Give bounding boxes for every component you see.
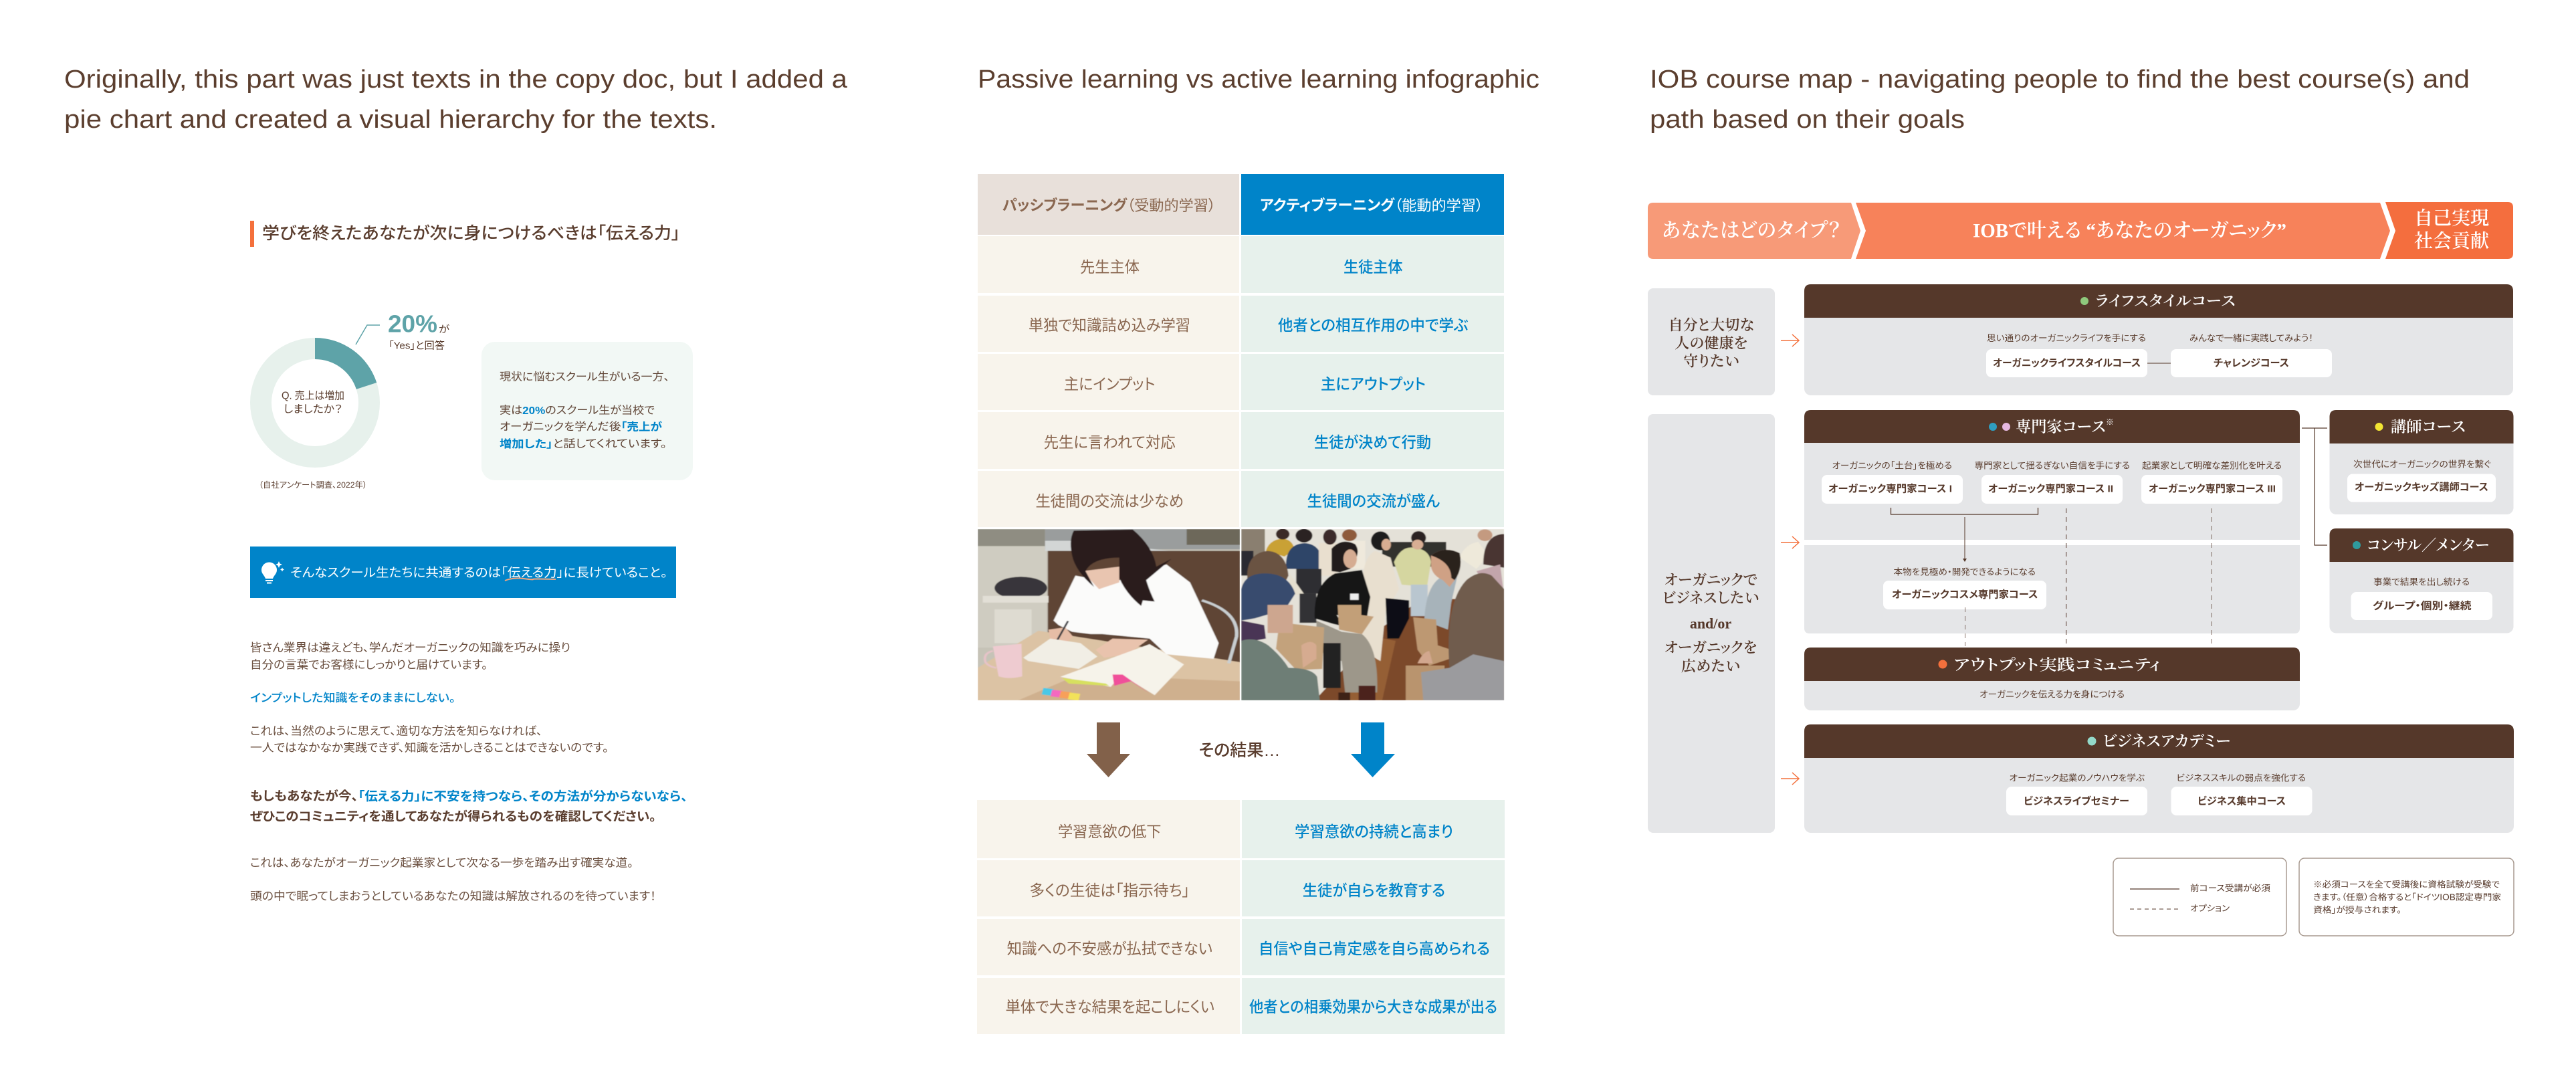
- text block: body copy: 自分の言葉でお客様にしっかりと届けています。: [250, 658, 488, 672]
- goal box: business: オーガニックで: [1664, 571, 1757, 589]
- panel: lifestyle course: [1804, 284, 2513, 395]
- panel: business academy: ビジネス集中コース: [2197, 795, 2286, 807]
- title: pie chart caption: Originally, this part was just texts in the copy doc, but I added a: [64, 66, 848, 94]
- panel: business academy: ビジネスアカデミー: [2103, 733, 2231, 749]
- text block: body copy: これは、当然のように思えて、適切な方法を知らなければ、: [250, 725, 542, 737]
- chevron banner: あなたはどのタイプ？: [1662, 219, 1841, 242]
- legend: qualification note: きます。（任意）合格すると「ドイツIOB認定専門家: [2313, 892, 2501, 902]
- passive column cells: 先生主体: [1080, 258, 1140, 276]
- panel: instructor course: オーガニックキッズ講師コース: [2355, 481, 2488, 493]
- panel: course map: [1648, 202, 2514, 936]
- panel: lifestyle course: 思い通りのオーガニックライフを手にする: [1987, 333, 2146, 343]
- panel: instructor course: 次世代にオーガニックの世界を繋ぐ: [2353, 459, 2490, 470]
- passive column cells: 生徒間の交流は少なめ: [1035, 492, 1184, 510]
- active results cells: 学習意欲の持続と高まり: [1295, 823, 1453, 840]
- panel: consultant and mentor: [2330, 528, 2513, 633]
- callout: 20 percent answered yes: 20%: [388, 310, 437, 337]
- legend: qualification note: ※必須コースを全て受講後に資格試験が受験で: [2313, 879, 2500, 890]
- goal box: business: [1648, 414, 1775, 833]
- banner: the power to communicate: [250, 547, 676, 598]
- active results cells: 生徒が自らを教育する: [1303, 882, 1445, 899]
- panel: expert course: ※: [2106, 417, 2114, 427]
- legend: qualification note: 資格」が授与されます。: [2313, 904, 2401, 915]
- table header: active: [1241, 174, 1504, 235]
- panel: survey summary: [481, 342, 693, 480]
- panel: consultant and mentor: 事業で結果を出し続ける: [2373, 577, 2470, 587]
- passive results cells: 知識への不安感が払拭できない: [1007, 940, 1212, 957]
- passive results cells: 学習意欲の低下: [1058, 823, 1161, 840]
- photo: students in active group discussion: [1241, 528, 1504, 700]
- donut chart: 20 percent yes: [261, 338, 377, 457]
- panel: survey summary: オーガニックを学んだ後 「売上が: [500, 420, 662, 433]
- chart source note: （自社アンケート調査、2022年）: [259, 480, 367, 490]
- legend: line types: オプション: [2190, 904, 2230, 913]
- goal box: business: ビジネスしたい: [1662, 590, 1759, 606]
- text block: body copy: 頭の中で眠ってしまおうとしているあなたの知識は解放されるのを待っています！: [250, 890, 656, 903]
- panel: expert course: 専門家として揺るぎない自信を手にする: [1974, 460, 2130, 471]
- panel: expert course: オーガニック専門家コース I: [1828, 483, 1952, 495]
- title: course map caption: [1650, 66, 2470, 134]
- panel: survey and communication copy: [250, 221, 693, 903]
- title: pie chart caption: [64, 66, 848, 134]
- title: course map caption: IOB course map - navigating people to find the best course(s) and: [1650, 66, 2470, 94]
- chevron banner: 社会貢献: [2414, 230, 2490, 252]
- panel: output community: [1804, 648, 2300, 710]
- panel: output community: アウトプット実践コミュニティ: [1953, 657, 2161, 673]
- table header: passive: パッシブラーニング（受動的学習）: [1002, 197, 1216, 214]
- panel: survey summary: 増加した」 と話してくれています。: [500, 437, 667, 450]
- panel: consultant and mentor: グループ・個別・継続: [2373, 599, 2472, 611]
- panel: instructor course: [2330, 410, 2513, 514]
- panel: expert course: オーガニックコスメ専門家コース: [1892, 589, 2038, 601]
- panel: business academy: ビジネスライブセミナー: [2024, 795, 2129, 807]
- table header: passive: [978, 174, 1239, 235]
- goal box: health: 自分と大切な: [1669, 317, 1754, 333]
- text block: body copy: これは、あなたがオーガニック起業家として次なる一歩を踏み出す確実な道。: [250, 856, 633, 870]
- passive column cells: 先生に言われて対応: [1044, 433, 1176, 451]
- chevron banner: IOBで叶える “あなたのオーガニック”: [1973, 219, 2286, 242]
- title: course map caption: path based on their goals: [1650, 106, 1965, 134]
- arrow: business to expert: [1781, 536, 1799, 549]
- label: as a result: その結果…: [1198, 741, 1280, 760]
- chevron banner: [1648, 202, 2513, 259]
- text block: body copy: 一人ではなかなか実践できず、知識を活かしきることはできないのです。: [250, 741, 609, 755]
- panel: expert course: 起業家として明確な差別化を叶える: [2142, 460, 2282, 471]
- dashed option lines: [1965, 508, 2212, 648]
- text block: body copy: もしもあなたが今、 「伝える力」に不安を持つなら、その方法が分からないなら、: [250, 789, 687, 803]
- goal box: health: 守りたい: [1683, 353, 1739, 369]
- text block: body copy: インプットした知識をそのままにしない。: [250, 692, 455, 704]
- panel: expert course: オーガニック専門家コース III: [2149, 483, 2276, 495]
- active column cells: 生徒間の交流が盛ん: [1307, 492, 1440, 510]
- arrow: passive results: [1087, 722, 1130, 777]
- callout: 20 percent answered yes: [356, 310, 449, 352]
- goal box: health: [1648, 288, 1775, 395]
- banner: the power to communicate: そんなスクール生たちに共通するのは「伝える力」に長けていること。: [290, 566, 667, 579]
- goal box: health: 人の健康を: [1675, 334, 1748, 352]
- legend: line types: [2113, 858, 2286, 936]
- donut chart: 20 percent yes: Q. 売上は増加: [282, 389, 344, 401]
- arrow: active results: [1351, 722, 1395, 777]
- panel: consultant and mentor: コンサル／メンター: [2367, 536, 2490, 554]
- active results cells: [1242, 800, 1505, 1034]
- photo: woman studying alone: [978, 529, 1240, 700]
- panel: business academy: [1804, 724, 2514, 833]
- panel: lifestyle course: チャレンジコース: [2214, 357, 2289, 369]
- legend: qualification note: [2299, 858, 2514, 936]
- passive column cells: [978, 236, 1239, 527]
- panel: expert course: オーガニックの「土台」を極める: [1832, 460, 1952, 471]
- icon: light bulb: [261, 561, 284, 583]
- passive column cells: 主にインプット: [1064, 375, 1156, 393]
- panel: business academy: ビジネススキルの弱点を強化する: [2176, 773, 2306, 783]
- legend: line types: 前コース受講が必須: [2190, 883, 2271, 893]
- active column cells: 他者との相互作用の中で学ぶ: [1278, 316, 1469, 334]
- panel: survey summary: 実は20%のスクール生が当校で: [500, 404, 655, 416]
- passive results cells: 単体で大きな結果を起こしにくい: [1006, 998, 1214, 1015]
- active column cells: 生徒が決めて行動: [1314, 433, 1431, 451]
- panel: instructor course: 講師コース: [2391, 419, 2466, 435]
- title: pie chart caption: pie chart and created a visual hierarchy for the texts.: [64, 106, 717, 134]
- passive results cells: 多くの生徒は「指示待ち」: [1030, 882, 1190, 899]
- panel: expert course: オーガニック専門家コース II: [1988, 483, 2113, 495]
- callout: 20 percent answered yes: 「Yes」と回答: [389, 340, 445, 352]
- goal box: business: and/or: [1690, 615, 1731, 631]
- panel: business academy: オーガニック起業のノウハウを学ぶ: [2009, 773, 2145, 783]
- panel: lifestyle course: ライフスタイルコース: [2095, 293, 2236, 309]
- active results cells: 他者との相乗効果から大きな成果が出る: [1249, 998, 1497, 1015]
- heading: what to learn next: 学びを終えたあなたが次に身につけるべきは「伝える力」: [262, 224, 680, 243]
- goal box: business: オーガニックを: [1664, 639, 1757, 656]
- passive results cells: [977, 800, 1240, 1034]
- text block: body copy: [250, 641, 687, 903]
- text block: body copy: 皆さん業界は違えども、学んだオーガニックの知識を巧みに操り: [250, 641, 570, 654]
- panel: expert course: 専門家コース: [2016, 419, 2105, 435]
- connector: expert to instructor and consultant: [2302, 428, 2327, 545]
- panel: expert course: [1804, 410, 2300, 633]
- panel: lifestyle course: オーガニックライフスタイルコース: [1993, 357, 2141, 369]
- donut chart: 20 percent yes: しましたか？: [284, 403, 342, 415]
- table header: active: アクティブラーニング（能動的学習）: [1260, 197, 1483, 214]
- arrow: health to lifestyle: [1781, 334, 1799, 346]
- active column cells: [1241, 236, 1504, 527]
- chevron banner: 自己実現: [2414, 207, 2489, 229]
- active column cells: 主にアウトプット: [1321, 375, 1426, 393]
- panel: output community: オーガニックを伝える力を身につける: [1979, 689, 2125, 700]
- goal box: business: 広めたい: [1681, 658, 1740, 674]
- callout: 20 percent answered yes: が: [439, 324, 449, 334]
- active column cells: 生徒主体: [1344, 258, 1403, 276]
- title: passive vs active caption: Passive learning vs active learning infographic: [978, 66, 1539, 94]
- panel: lifestyle course: みんなで一緒に実践してみよう！: [2189, 333, 2313, 343]
- panel: expert course: 本物を見極め・開発できるようになる: [1894, 567, 2036, 577]
- text block: body copy: ぜひこのコミュニティを通してあなたが得られるものを確認してください。: [250, 809, 656, 823]
- active results cells: 自信や自己肯定感を自ら高められる: [1259, 940, 1490, 957]
- panel: comparison table: [977, 174, 1505, 1034]
- passive column cells: 単独で知識詰め込み学習: [1029, 316, 1190, 334]
- heading: what to learn next: [250, 221, 680, 247]
- panel: survey summary: 現状に悩むスクール生がいる一方、: [500, 371, 669, 383]
- arrow: business to academy: [1781, 773, 1799, 785]
